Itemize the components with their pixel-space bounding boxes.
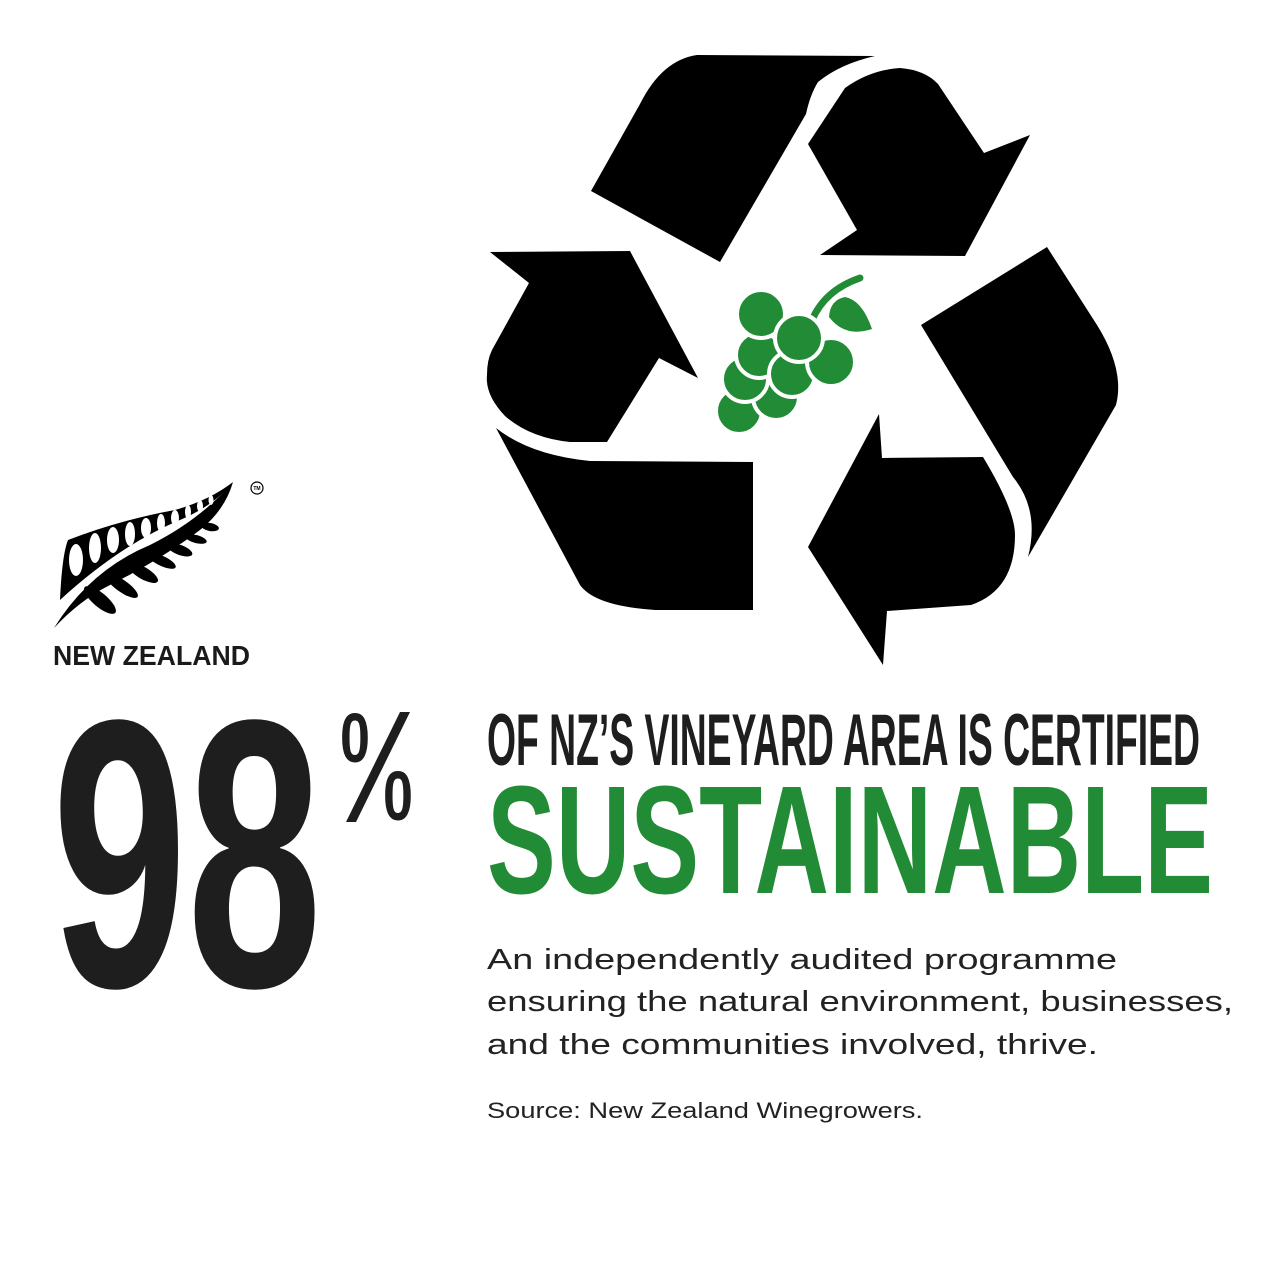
source: Source: New Zealand Winegrowers. [487,1098,923,1123]
logo text: NEW ZEALAND [53,640,250,671]
percent sign: 0 [383,757,413,835]
icon: grapes [716,278,872,434]
logo: silver fern [54,482,263,628]
logo: silver fern: TM [253,486,261,492]
percent sign [340,699,413,835]
body text [487,944,1233,1061]
percent sign: 0 [340,699,370,777]
big number 98: 98 [52,640,322,1067]
body text: ensuring the natural environment, businesses, [487,986,1233,1018]
body text: An independently audited programme [487,944,1117,976]
recycle symbol [487,55,1118,665]
body text: and the communities involved, thrive. [487,1029,1098,1061]
